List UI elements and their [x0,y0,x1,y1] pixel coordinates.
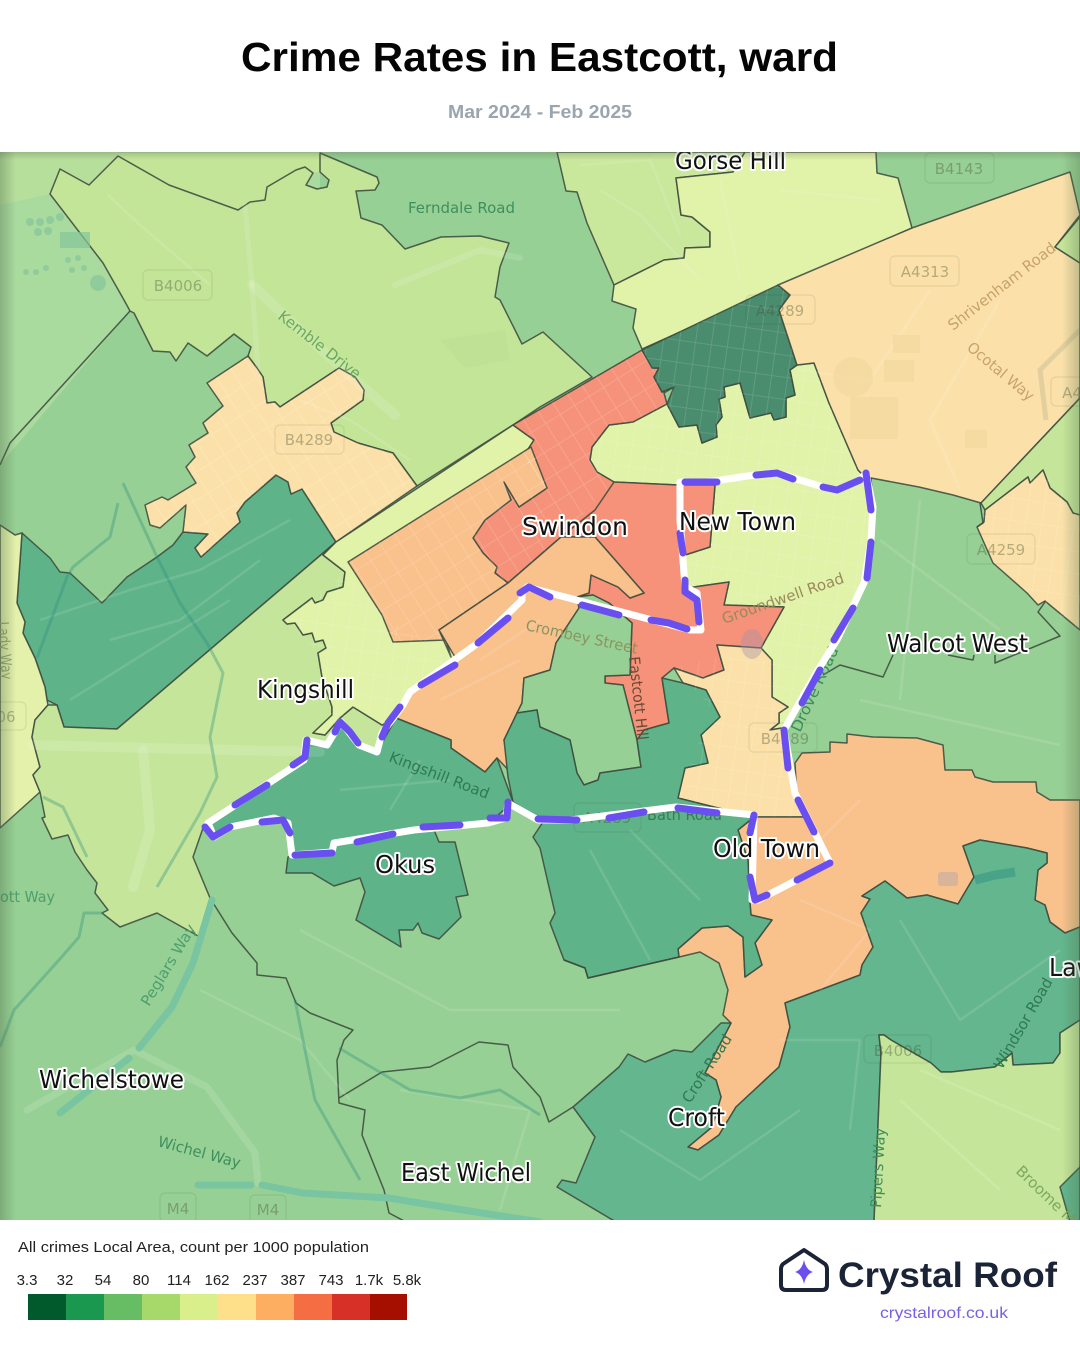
region: Kingshill Road and Okus dark green [208,718,513,947]
road pills: A4259 [977,541,1025,559]
road names: Kemble Drive [275,307,364,383]
place labels: Walcot West [887,629,1028,658]
legend scale labels: 162 [204,1272,230,1289]
legend scale labels [17,1272,422,1289]
wordmark: Crystal Roof [838,1256,1057,1295]
road pills: M4 [167,1200,189,1218]
logo: Crystal Roof [781,1250,1057,1322]
place labels [39,146,1080,1187]
road names: Crombey Street [524,616,640,658]
road names: Pipers Way [867,1127,889,1208]
subtitle: date range: Mar 2024 - Feb 2025 [448,102,632,122]
region: Kingshill and Rodbourne light green [32,542,396,937]
region: Eastern peach [778,172,1080,503]
street grid texture [145,285,1080,817]
Walcot West internal boundaries [823,503,1060,677]
legend scale labels: 5.8k [393,1272,422,1289]
region: Gorse Hill north band [612,152,912,349]
road pills: A4313 [901,263,949,281]
region: Old Town orange [678,734,1080,1150]
region: Kingshill pale band [283,425,540,735]
legend scale labels: 80 [133,1272,149,1289]
legend scale labels: 114 [167,1272,191,1289]
road names: Ocotal Way [963,338,1038,405]
road names: Groundwell Road [719,569,846,628]
salmon internal boundary [561,482,614,537]
region: Old Town peach [674,645,809,817]
place labels: Swindon [522,512,628,541]
road names: Drove Road [787,644,843,735]
road pills: B4289 [285,431,333,449]
region: New Town pale [590,363,873,730]
place labels: Old Town [713,834,820,863]
icon: house with star [781,1250,827,1290]
top fill above north-west region [118,153,320,210]
title: Crime Rates in Eastcott, ward [241,34,838,80]
legend [17,1239,422,1320]
road pills: B4006 [874,1042,922,1060]
road names: Wichel Way [156,1132,243,1172]
region: Gorse Hill west [557,152,745,285]
road pills: A4289 [583,809,631,827]
region: Rodbourne orange [348,447,547,657]
place labels: Gorse Hill [675,146,786,175]
region: Westlea peach [145,356,417,557]
legend scale labels: 3.3 [17,1272,37,1289]
road names: Bath Road [647,806,722,824]
place labels: Okus [375,850,435,879]
road names: Kingshill Road [387,748,492,803]
road names: Shrivenham Road [944,239,1059,334]
place labels: Kingshill [257,675,354,704]
legend scale labels: 54 [95,1272,111,1289]
ward dashes purple [205,473,871,900]
website: crystalroof.co.uk [880,1305,1009,1322]
place labels: East Wichel [401,1158,531,1187]
region: north-west light green [50,153,592,486]
road pills: B4006 [154,277,202,295]
region: Broadgreen dark green [642,285,797,443]
region: town centre salmon [473,350,784,740]
road names: Windsor Road [990,975,1056,1072]
region: Walcot peach [977,470,1080,630]
place labels: New Town [679,507,796,536]
south-west boundary lines [210,898,679,1222]
map edge vignette [0,152,1080,1220]
region: north-east corner light green [1055,217,1080,263]
road names: Eastcott Hill [625,656,652,741]
region: Eastcott orange [396,537,644,777]
road pills: B4289 [761,730,809,748]
road names: Croft Road [678,1031,736,1106]
road pills: A4289 [756,302,804,320]
road names [0,199,1080,1252]
legend scale labels: 743 [318,1272,344,1289]
ward boundary: Eastcott [205,473,873,900]
region: south-east corner green [1060,1167,1080,1222]
road pills: B4143 [935,160,983,178]
legend scale labels: 1.7k [355,1272,384,1289]
street network overlay [27,160,1060,1210]
place labels: Wichelstowe [39,1065,184,1094]
region: Crombey Street green [517,595,641,785]
legend scale labels: 237 [242,1272,268,1289]
motorway and water features [0,213,1080,1222]
legend scale labels: 32 [57,1272,73,1289]
boundary lines west [0,311,130,465]
place labels: Croft [668,1103,725,1132]
road names: ott Way [0,888,55,906]
legend scale labels: 387 [280,1272,306,1289]
region: east light green strip [981,398,1080,515]
region: Eastcott south dark green [504,678,772,978]
road names: Peglars Way [137,921,200,1009]
road pills: M4 [257,1201,279,1219]
road pills [0,153,1080,1224]
region: Broome Manor light green [874,1020,1080,1222]
road names: Ferndale Road [408,199,515,217]
legend colour scale [28,1294,407,1320]
legend title: All crimes Local Area, count per 1000 population [18,1239,369,1256]
region: far-west pale strip [0,525,48,828]
ward outline white [208,473,873,900]
region: Toothill dark green [17,475,336,729]
region: Croft and Lawn green [557,840,1080,1222]
